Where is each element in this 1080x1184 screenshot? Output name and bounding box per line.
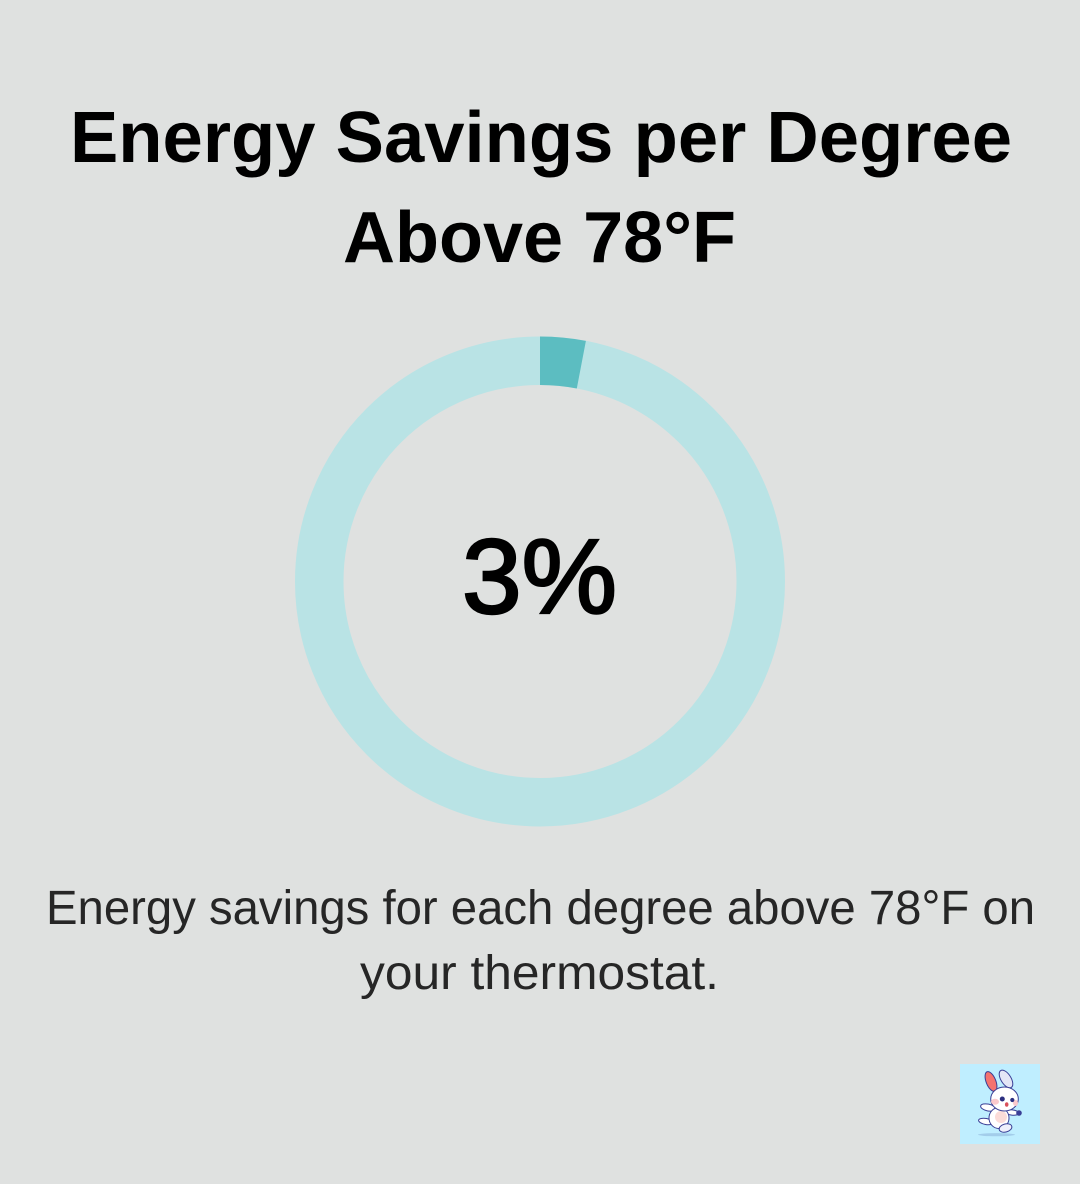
description text [46,882,1035,1000]
eyes [1000,1096,1005,1102]
title: Energy Savings per Degree [70,98,1012,178]
description text: Energy savings for each degree above 78°F on [46,882,1035,935]
paw [1016,1110,1022,1116]
right ear [996,1068,1016,1090]
icon: running bunny logo [960,1064,1040,1144]
title [70,98,1012,278]
belly [995,1111,1007,1123]
description text: your thermostat. [360,947,719,1000]
highlighted 3% segment [540,336,586,388]
front leg [998,1122,1013,1134]
cheeks [991,1099,999,1105]
back leg [978,1117,994,1126]
right arm [1005,1109,1019,1116]
title: Above 78°F [343,198,736,278]
head [991,1087,1018,1111]
ground shadow [978,1133,1015,1136]
mouth [1005,1102,1008,1107]
donut chart [319,336,761,802]
left ear [983,1070,999,1093]
big percentage value: 3% [462,518,617,636]
body [989,1108,1009,1128]
left arm [980,1103,996,1112]
